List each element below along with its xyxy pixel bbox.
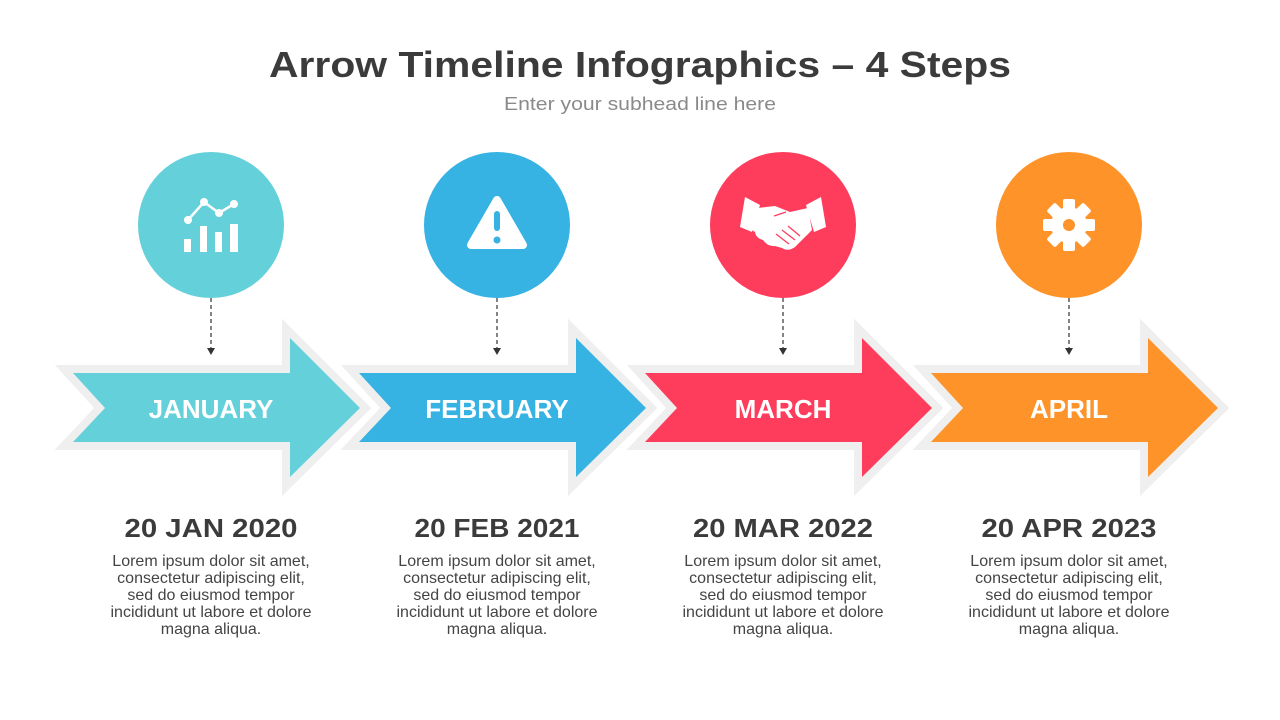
icon circle: chart <box>138 152 284 298</box>
dashed connector <box>779 298 787 355</box>
body text: magna aliqua. <box>733 621 833 638</box>
body text: Lorem ipsum dolor sit amet, <box>970 553 1168 570</box>
step 3: March <box>645 152 932 638</box>
body text: incididunt ut labore et dolore <box>110 604 312 621</box>
body text: sed do eiusmod tempor <box>985 587 1153 604</box>
body text: incididunt ut labore et dolore <box>968 604 1170 621</box>
arrow: April <box>931 338 1218 477</box>
body text: Lorem ipsum dolor sit amet, <box>112 553 310 570</box>
date: 20 JAN 2020 <box>124 513 298 543</box>
arrow: January <box>73 338 360 477</box>
body text: consectetur adipiscing elit, <box>975 570 1163 587</box>
body text: consectetur adipiscing elit, <box>117 570 305 587</box>
subtitle: Enter your subhead line here <box>504 94 776 114</box>
body text: Lorem ipsum dolor sit amet, <box>398 553 596 570</box>
body text: Lorem ipsum dolor sit amet, <box>684 553 882 570</box>
dashed connector <box>207 298 215 355</box>
arrow: February: FEBRUARY <box>425 394 569 424</box>
body text: magna aliqua. <box>447 621 547 638</box>
icon circle: handshake <box>710 152 856 298</box>
step 2: February <box>359 152 646 638</box>
body text: incididunt ut labore et dolore <box>682 604 884 621</box>
dashed connector <box>493 298 501 355</box>
body text: incididunt ut labore et dolore <box>396 604 598 621</box>
date: 20 APR 2023 <box>982 513 1156 543</box>
date: 20 FEB 2021 <box>414 513 580 543</box>
arrow: April: APRIL <box>1030 394 1108 424</box>
title: Arrow Timeline Infographics – 4 Steps <box>269 44 1011 85</box>
icon circle: gear <box>996 152 1142 298</box>
body text: sed do eiusmod tempor <box>127 587 295 604</box>
body text: magna aliqua. <box>1019 621 1119 638</box>
date: 20 MAR 2022 <box>693 513 873 543</box>
arrow: February <box>359 338 646 477</box>
dashed connector <box>1065 298 1073 355</box>
body text: consectetur adipiscing elit, <box>689 570 877 587</box>
body text: sed do eiusmod tempor <box>413 587 581 604</box>
icon circle: warning <box>424 152 570 298</box>
arrow: January: JANUARY <box>149 394 273 424</box>
body text: sed do eiusmod tempor <box>699 587 867 604</box>
arrow: March: MARCH <box>735 394 831 424</box>
step 1: January <box>73 152 360 638</box>
step 4: April <box>931 152 1218 638</box>
body text: magna aliqua. <box>161 621 261 638</box>
arrow: March <box>645 338 932 477</box>
body text: consectetur adipiscing elit, <box>403 570 591 587</box>
